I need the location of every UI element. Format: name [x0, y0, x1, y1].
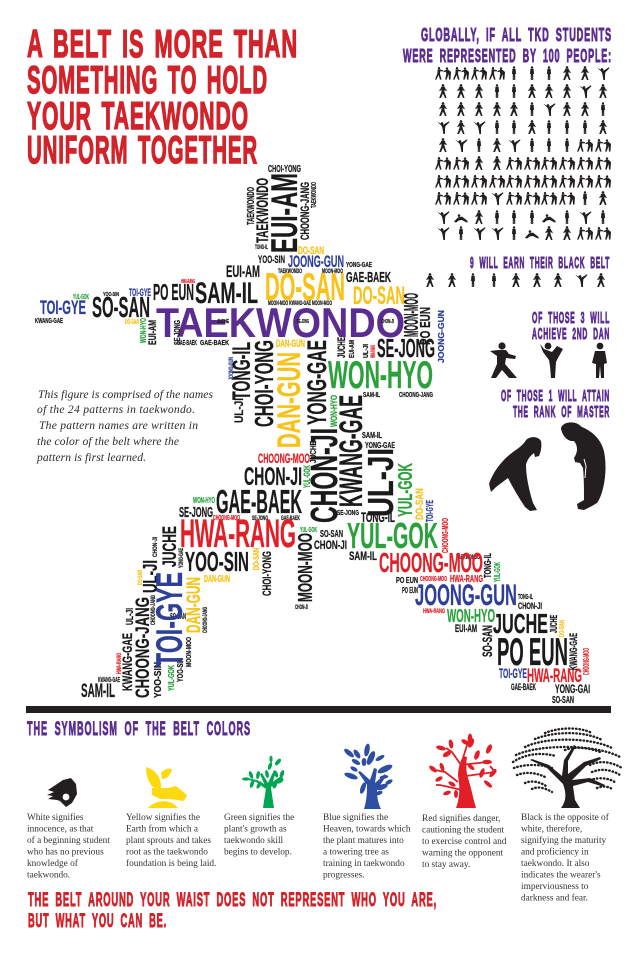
label: 3 will achieve 2nd dan [532, 310, 610, 343]
black vertical words: TONG-IL [483, 553, 494, 578]
text: black belt: signifying the maturity [521, 835, 607, 846]
black horizontal words: CHOI-YONG [268, 164, 301, 175]
black vertical words: CHOONG-JANG [151, 595, 157, 625]
black horizontal words: SO-SAN [320, 529, 343, 540]
black horizontal words: MOON-MOO [322, 269, 343, 275]
black horizontal words: GAE-BAEK [281, 516, 300, 522]
pictogram: three 2nd dan figures [490, 342, 607, 378]
black vertical words: SE-JONG [173, 320, 182, 345]
black vertical words: TONG-IL [228, 342, 256, 400]
icon: black tree [513, 728, 622, 808]
text: green belt: plant's growth as [224, 824, 287, 834]
black vertical words: YOO-SIN [176, 658, 185, 682]
yellow vertical words [138, 352, 566, 637]
text: red belt: cautioning the student [422, 826, 505, 836]
black horizontal words: SE-JONG [179, 504, 213, 521]
text: blue belt: the plant matures into [323, 836, 404, 846]
title: UNIFORM TOGETHER [27, 129, 258, 172]
green horizontal words: WON-HYO [193, 496, 215, 505]
black vertical words: KWANG-GAE [568, 633, 580, 670]
text: white belt: White signifies [27, 812, 84, 823]
black vertical words: YOO-SIN [153, 662, 164, 698]
icon: white belt hand [47, 778, 77, 807]
black vertical words: CHOI-YONG [249, 340, 279, 427]
pictogram: 100 people [435, 66, 611, 240]
note: figure explanation: pattern is first learned. [36, 451, 146, 464]
black vertical words: MOON-MOO [186, 637, 193, 667]
black vertical words: CHOONG-JANG [298, 182, 312, 240]
yellow horizontal words: DAN-GUN [276, 338, 305, 350]
yellow horizontal words: DAN-GUN [204, 574, 230, 585]
yellow vertical words: DO-SAN [252, 548, 261, 570]
black horizontal words: YOO-SIN [185, 546, 249, 577]
black vertical words: UL-JI [360, 448, 401, 517]
yellow vertical words: DAN-GUN [184, 577, 205, 633]
label: 1 will attain master [501, 388, 610, 421]
yellow horizontal words: DO-SAN [265, 266, 345, 309]
black vertical words: UL-JI [363, 344, 370, 358]
black horizontal words: CHOONG-JANG [399, 392, 433, 399]
icon: blue tree [343, 743, 394, 809]
icon: yellow earth and sprout hand [146, 767, 187, 808]
red vertical words: HWA-RANG [117, 653, 123, 674]
black horizontal words: PO EUN [153, 279, 194, 305]
word cloud: taekwondo fighter figure: HWA-RANG [371, 345, 377, 358]
black vertical words: CHOONG-JANG [203, 607, 209, 633]
black vertical words [119, 173, 580, 698]
title [27, 23, 298, 172]
closing quote: BUT WHAT YOU CAN BE. [28, 911, 167, 932]
text: blue belt: progresses. [323, 870, 365, 880]
black vertical words: EUI-AM [264, 173, 305, 253]
black vertical words: TAEKWONDO [311, 182, 318, 208]
black horizontal words: SAM-IL [81, 681, 115, 702]
green horizontal words: YUL-GOK [347, 515, 438, 556]
icon: green plant tree [242, 756, 285, 808]
red horizontal words: HWA-RANG [423, 609, 445, 615]
black vertical words: MOON-MOO [295, 533, 317, 602]
black horizontal words: TONG-IL [361, 509, 395, 525]
black vertical words: EUI-AM [349, 340, 356, 358]
black vertical words: UL-JI [140, 560, 162, 593]
icon: red tree [428, 734, 498, 808]
blue vertical words: TOI-GYE [149, 572, 190, 667]
word cloud: taekwondo fighter figure: TOI-GYE [499, 665, 527, 681]
text: black belt: Black is the opposite of [521, 812, 610, 823]
text: blue belt: training in taekwondo [323, 859, 405, 869]
black horizontal words: GAE-BAEK [216, 483, 302, 520]
text: blue belt: a towering tree as [323, 848, 389, 858]
green vertical words: YUL-GOK [395, 463, 417, 517]
black horizontal words: SE-JONG [297, 319, 309, 325]
text: yellow belt: root as the taekwondo [126, 848, 208, 858]
green horizontal words: YUL-GOK [73, 294, 89, 301]
word cloud: taekwondo fighter figure [35, 164, 591, 706]
text: white belt: knowledge of [27, 858, 79, 869]
green horizontal words [73, 294, 495, 626]
pictogram: 9 black belts [426, 273, 605, 287]
black horizontal words: CHON-JI [295, 605, 308, 611]
black vertical words: EUI-AM [147, 320, 159, 345]
green horizontal words: WON-HYO [447, 606, 495, 626]
black horizontal words: CHON-JI [244, 463, 302, 491]
green horizontal words: WON-HYO [328, 354, 433, 397]
text: white belt: who has no previous [27, 848, 104, 858]
black horizontal words: SAM-IL [363, 392, 381, 399]
black horizontal words: JUCHE [217, 319, 229, 325]
black vertical words: YONG-GAE [179, 548, 185, 568]
text: white belt: innocence, as that [27, 824, 94, 834]
pictogram: two bowing masters [489, 422, 606, 511]
green vertical words: WON-HYO [139, 318, 148, 343]
black horizontal words: MOON-MOO KWANG-GAE MOON-MOO [268, 301, 332, 307]
yellow horizontal words: DO-SAN [353, 282, 405, 310]
black vertical words: TAEKWONDO [246, 187, 257, 225]
blue vertical words: JOONG-GUN [437, 310, 446, 363]
word: TAEKWONDO: TAEKWONDO [156, 299, 405, 346]
text: black belt: imperviousness to [521, 882, 589, 892]
text: white belt: taekwondo. [27, 870, 70, 880]
black vertical words: CHOI-YONG [260, 551, 274, 596]
black vertical words: KWANG-GAE [119, 633, 135, 691]
black horizontal words: CHON-JI [381, 319, 394, 325]
yellow horizontal words [125, 245, 405, 585]
black horizontal words: JUCHE [493, 608, 548, 639]
black horizontal words: TONG-IL [255, 245, 268, 251]
black horizontal words: EUI-AM [226, 262, 260, 281]
black horizontal words: SE-JONG [252, 516, 268, 522]
black horizontal words: CHON-JI [314, 538, 347, 552]
red vertical words: CHOONG-MOO [582, 648, 591, 675]
green horizontal words: YUL-GOK [300, 527, 317, 534]
text: green belt: begins to develop. [224, 848, 292, 858]
black vertical words: CHON-JI [153, 537, 159, 557]
black vertical words: MOON-MOO [401, 293, 423, 337]
black vertical words: CHOONG-JANG [133, 597, 154, 698]
title: SOMETHING TO HOLD [27, 59, 268, 102]
black horizontal words: PO EUN [396, 576, 418, 585]
closing quote [28, 890, 437, 932]
black horizontal words: YONG-GAE [365, 441, 395, 450]
text: blue belt: Blue signifies the [323, 812, 388, 823]
text: THE SYMBOLISM OF THE BELT COLORS [27, 719, 251, 740]
text: yellow belt: Earth from which a [126, 824, 198, 834]
red horizontal words: CHOONG-MOO [379, 547, 483, 578]
blue vertical words [149, 310, 446, 667]
blue horizontal words: TOI-GYE [40, 298, 86, 319]
text: black belt: white, therefore, [521, 824, 582, 834]
black horizontal words: YOO-SIN [103, 292, 119, 298]
black horizontal words: CHON-JI [518, 601, 542, 611]
blue horizontal words: JOONG-GUN [415, 579, 517, 612]
green vertical words [139, 318, 502, 691]
text: yellow belt: Yellow signifies the [126, 812, 200, 823]
text: blue belt: Heaven, towards which [323, 824, 411, 834]
red horizontal words: HWA-RANG [180, 512, 296, 556]
title: A BELT IS MORE THAN [27, 23, 298, 66]
black horizontal words: TAEKWONDO [278, 269, 302, 275]
black horizontal words [35, 164, 590, 706]
black horizontal words: GAE-BAEK [177, 340, 197, 347]
black horizontal words: SO-SAN [552, 695, 574, 706]
blue vertical words: JOONG-GUN [229, 357, 235, 380]
black horizontal words: PO EUN [402, 586, 418, 595]
black vertical words: JUCHE [336, 337, 348, 358]
black vertical words: UL-JI [125, 608, 136, 625]
red horizontal words: HWA-RANG [450, 574, 483, 585]
black horizontal words: GAE-BAEK [200, 340, 229, 347]
black horizontal words: SE-JONG [337, 510, 359, 517]
green vertical words: YUL-GOK [167, 665, 176, 691]
black vertical words: CHON-JI [304, 428, 346, 523]
text: yellow belt: plant sprouts and takes [126, 836, 211, 846]
text: yellow belt: foundation is being laid. [126, 858, 216, 869]
blue horizontal words: JOONG-GUN [288, 252, 344, 271]
black horizontal words: SAM-IL [362, 431, 382, 440]
heading: globally 100 people [403, 25, 612, 66]
text: black belt: taekwondo. It also [521, 859, 590, 869]
black horizontal words: SAM-IL [195, 277, 258, 310]
note: figure explanation: This figure is comprised of the names [38, 388, 213, 401]
note: figure explanation: of the 24 patterns in taekwondo. [37, 403, 195, 416]
text: black belt: indicates the wearer's [521, 870, 601, 880]
black vertical words: PO EUN [417, 307, 434, 345]
red horizontal words [180, 279, 582, 687]
red horizontal words: CHOONG-MOO [258, 450, 310, 466]
divider bar [26, 706, 611, 713]
black horizontal words: SO-SAN [92, 292, 150, 324]
black horizontal words: GAE-BAEK [346, 269, 391, 286]
black horizontal words: YONG-GAI [555, 682, 590, 696]
black vertical words: JUCHE [549, 615, 560, 633]
text: black belt: darkness and fear. [521, 892, 588, 904]
text: black belt: and proficiency in [521, 846, 589, 858]
note: figure explanation: the color of the belt where the [37, 435, 179, 448]
black horizontal words: EUI-AM [455, 623, 477, 635]
yellow vertical words: DO-SAN [138, 570, 144, 585]
text: red belt: to stay away. [422, 860, 470, 870]
black horizontal words: GAE-BAEK [511, 682, 536, 692]
text: green belt: taekwondo skill [224, 836, 284, 846]
red vertical words [117, 345, 591, 675]
black horizontal words: KWANG-GAE [98, 677, 120, 684]
yellow vertical words: DAN-GUN [271, 352, 307, 448]
text: red belt: to exercise control and [422, 837, 507, 847]
text: green belt: Green signifies the [224, 812, 294, 823]
yellow horizontal words: DO-SAN [298, 245, 324, 257]
black vertical words: KWANG-GAE [333, 395, 369, 507]
green vertical words: WON-HYO [329, 395, 339, 427]
yellow vertical words: DO-SAN [559, 620, 566, 637]
yellow vertical words: DO-SAN [414, 488, 426, 520]
black vertical words: UL-JI [232, 398, 246, 423]
text: white belt: of a beginning student [27, 835, 110, 846]
black vertical words: TAEKWONDO [253, 178, 272, 243]
title: YOUR TAEKWONDO [27, 95, 249, 138]
black horizontal words: SO-SAN [170, 612, 186, 621]
red vertical words: CHOONG-MOO [441, 518, 450, 553]
black vertical words: JUCHE [309, 440, 318, 463]
red horizontal words: CHOONG-MOO [420, 576, 447, 583]
black horizontal words: SAM-IL [349, 549, 377, 563]
note: figure explanation [36, 388, 213, 464]
green vertical words: YUL-GOK [302, 465, 312, 488]
green vertical words: YUL-GOK [493, 562, 502, 582]
black horizontal words: KWANG-GAE [35, 318, 63, 325]
blue vertical words: TOI-GYE [425, 500, 436, 522]
blue horizontal words [40, 252, 527, 681]
note: figure explanation: The pattern names are written in [39, 419, 198, 432]
black vertical words: JUCHE [160, 526, 181, 567]
black horizontal words: SE-JONG [377, 333, 435, 363]
text: red belt: warning the opponent [422, 848, 503, 858]
blue horizontal words: TOI-GYE [129, 287, 151, 299]
black vertical words: YONG-GAE [302, 340, 332, 425]
red horizontal words: HWA-RANG [181, 279, 195, 285]
black vertical words: SO-SAN [479, 625, 495, 657]
black horizontal words: TAEKWONDO [456, 555, 480, 561]
red horizontal words: HWA-RANG [527, 666, 582, 687]
text: red belt: Red signifies danger, [422, 813, 500, 824]
red horizontal words: CHOONG-MOO [213, 515, 240, 522]
black horizontal words: TONG-IL [518, 594, 533, 601]
black horizontal words: YONG-GAE [346, 262, 372, 269]
black horizontal words: YOO-SIN [258, 254, 285, 266]
yellow horizontal words: DO-SAN [125, 319, 139, 326]
